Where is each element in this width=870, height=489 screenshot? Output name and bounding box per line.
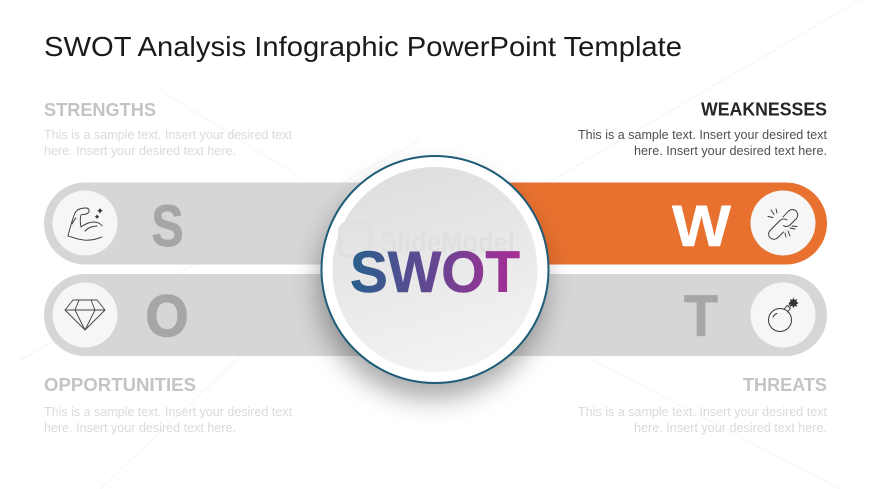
text block: weaknesses xyxy=(578,98,828,158)
text block: weaknesses: WEAKNESSES xyxy=(701,98,827,120)
text block: strengths: here. Insert your desired text here. xyxy=(44,144,236,158)
icon: diamond xyxy=(52,282,118,348)
letter T: T xyxy=(684,284,718,349)
panel: opportunities bar xyxy=(44,274,444,356)
text block: threats xyxy=(578,374,828,435)
central circle xyxy=(318,156,548,399)
SWOT label: SWOT xyxy=(350,240,520,305)
text block: strengths: This is a sample text. Insert your desired text xyxy=(44,128,293,142)
text block: weaknesses: here. Insert your desired text here. xyxy=(634,144,827,158)
watermark xyxy=(340,222,515,259)
title: SWOT Analysis Infographic PowerPoint Template xyxy=(44,31,682,62)
icon: flexed arm xyxy=(52,190,118,256)
letter S: S xyxy=(152,194,184,259)
letter O: O xyxy=(146,284,188,349)
text block: opportunities: here. Insert your desired text here. xyxy=(44,421,236,435)
text block: threats: This is a sample text. Insert your desired text xyxy=(578,405,828,419)
text block: strengths xyxy=(44,99,293,158)
watermark: SlideModel xyxy=(380,227,515,259)
text block: weaknesses: This is a sample text. Insert your desired text xyxy=(578,128,828,142)
text block: opportunities: OPPORTUNITIES xyxy=(44,374,196,395)
text block: strengths: STRENGTHS xyxy=(44,99,156,120)
icon: bomb xyxy=(750,282,816,348)
text block: opportunities: This is a sample text. Insert your desired text xyxy=(44,405,293,419)
text block: threats: here. Insert your desired text here. xyxy=(634,421,827,435)
text block: opportunities xyxy=(44,374,293,435)
icon: broken chain xyxy=(750,190,816,256)
panel: threats bar xyxy=(430,274,827,356)
panel: strengths bar xyxy=(44,182,444,264)
panel: weaknesses bar xyxy=(430,182,827,264)
letter W: W xyxy=(672,194,731,259)
text block: threats: THREATS xyxy=(743,374,827,395)
